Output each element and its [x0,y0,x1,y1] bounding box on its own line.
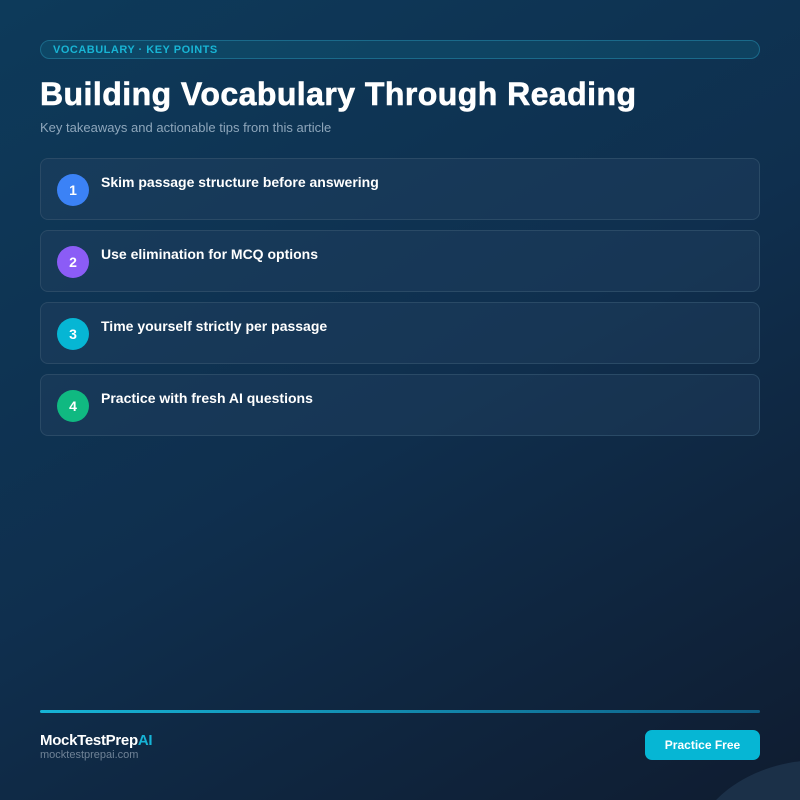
footer divider line [40,710,760,713]
brand: MockTestPrepAI [40,732,152,749]
badge 2: 2 [69,254,77,270]
card 4 [40,374,760,436]
text 3: Time yourself strictly per passage [101,318,327,334]
text 2: Use elimination for MCQ options [101,246,318,262]
badge 4 [57,390,89,422]
badge 3 [57,318,89,350]
card 1 [40,158,760,220]
subtitle: Key takeaways and actionable tips from this article [40,120,331,135]
title: Building Vocabulary Through Reading [40,76,636,112]
card 3 [40,302,760,364]
text 4: Practice with fresh AI questions [101,390,313,406]
button [645,730,760,760]
badge 3: 3 [69,326,77,342]
badge 4: 4 [69,398,77,414]
tag pill [40,40,760,59]
badge 2 [57,246,89,278]
decorative corner shape [716,761,800,800]
badge 1: 1 [69,182,77,198]
badge 1 [57,174,89,206]
card 2 [40,230,760,292]
url: mocktestprepai.com [40,749,138,761]
tag pill: VOCABULARY · KEY POINTS [53,44,218,56]
button: Practice Free [665,738,740,752]
text 1: Skim passage structure before answering [101,174,379,190]
